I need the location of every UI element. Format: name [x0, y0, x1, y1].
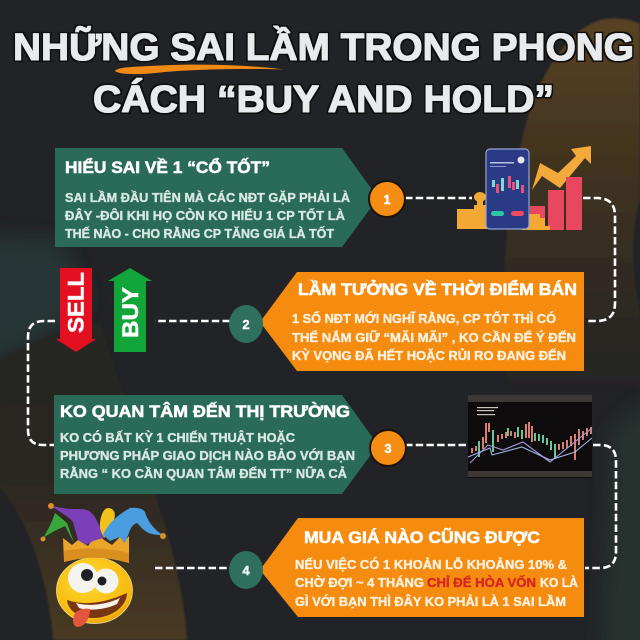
- panel 4 heading: MUA GIÁ NÀO CŨNG ĐƯỢC: [304, 527, 540, 547]
- panel 4 body: [295, 557, 578, 609]
- panel 3 body: PHƯƠNG PHÁP GIAO DỊCH NÀO BẢO VỚI BẠN: [60, 448, 355, 463]
- icon: sell arrow: [56, 268, 96, 352]
- panel 2 body: KỲ VỌNG ĐÃ HẾT HOẶC RỦI RO ĐANG ĐẾN: [292, 348, 566, 363]
- rising arrow: [532, 146, 591, 190]
- red bars: [530, 177, 582, 230]
- panel 4: buying at any price: [260, 518, 584, 617]
- panel 4 body: CHỜ ĐỢI ~ 4 THÁNG: [295, 575, 424, 590]
- yellow back hat lobe: [100, 508, 115, 538]
- title line 1: NHỮNG SAI LẦM TRONG PHONG: [13, 25, 634, 69]
- step badge 4: [229, 551, 263, 589]
- step badge 2: [229, 305, 263, 343]
- coins: [457, 192, 550, 230]
- title: [13, 25, 634, 121]
- moving average lines: [468, 428, 592, 463]
- panel 3: ignoring the market: [54, 395, 378, 494]
- step badge 2: 2: [242, 317, 250, 332]
- panel 2 body: [292, 311, 576, 363]
- phone: [486, 149, 529, 229]
- orange brush underline: [115, 65, 284, 74]
- tongue: [73, 609, 90, 627]
- step badge 3: [370, 430, 406, 466]
- title line 2: CÁCH “BUY AND HOLD”: [93, 77, 554, 121]
- icon: jester emoji: [40, 503, 166, 627]
- sell label: SELL: [64, 272, 88, 333]
- panel 1 heading: HIỂU SAI VỀ 1 “CỔ TỐT”: [65, 157, 270, 177]
- chart: candlestick screenshot: [468, 395, 592, 478]
- panel 3 body: RẰNG “ KO CẦN QUAN TÂM ĐẾN TT” NỮA CẢ: [60, 466, 347, 481]
- panel 2 body: 1 SỐ NĐT MỚI NGHĨ RẰNG, CP TỐT THÌ CÓ: [292, 311, 556, 326]
- face: [56, 558, 132, 624]
- step badge 1: [369, 181, 405, 217]
- panel 1 body: ĐÂY -ĐÔI KHI HỌ CÒN KO HIỂU 1 CP TỐT LÀ: [65, 208, 345, 223]
- panel 4 body: GÌ VỚI BẠN THÌ ĐÂY KO PHẢI LÀ 1 SAI LẦM: [295, 594, 566, 609]
- panel 4 body: KO LÀ: [540, 575, 578, 590]
- crown: [63, 533, 129, 563]
- step badge 3: 3: [384, 441, 392, 456]
- panel 3 heading: KO QUAN TÂM ĐẾN THỊ TRƯỜNG: [60, 402, 350, 421]
- eyes: [68, 563, 118, 594]
- panel 2 heading: LẦM TƯỞNG VỀ THỜI ĐIỂM BÁN: [298, 280, 577, 299]
- green hat flap: [43, 513, 74, 543]
- panel 1: misunderstanding a good stock: [55, 148, 378, 247]
- panel 1 body: THẾ NÀO - CHO RẰNG CP TĂNG GIÁ LÀ TỐT: [65, 226, 334, 241]
- mouth: [67, 593, 127, 618]
- panel 2: misconception about selling time: [260, 272, 584, 371]
- green candles: [478, 427, 556, 459]
- icon: buy arrow: [108, 268, 152, 352]
- red highlighted phrase: CHỈ ĐỂ HÒA VỐN: [427, 575, 536, 590]
- dashed connectors: [28, 198, 616, 568]
- panel 4 body: NẾU VIỆC CÓ 1 KHOẢN LỖ KHOẢNG 10% &: [295, 557, 567, 572]
- panel 3 body: [60, 430, 355, 481]
- panel 1 body: [65, 190, 350, 241]
- step badge 1: 1: [383, 192, 391, 207]
- panel 2 body: THỂ NẮM GIỮ “MÃI MÃI” , KO CẦN ĐỂ Ý ĐẾN: [292, 330, 576, 345]
- panel 1 body: SAI LẦM ĐẦU TIÊN MÀ CÁC NĐT GẶP PHẢI LÀ: [65, 190, 350, 205]
- buy label: BUY: [118, 287, 143, 338]
- purple hat flap: [51, 506, 103, 545]
- hat bells: [40, 503, 166, 542]
- panel 3 body: KO CÓ BẤT KỲ 1 CHIẾN THUẬT HOẶC: [60, 430, 295, 445]
- step badge 4: 4: [242, 563, 250, 578]
- icon: phone with trading chart and rising arrow: [457, 146, 591, 230]
- blue hat flap: [103, 508, 163, 543]
- red candles: [471, 422, 592, 460]
